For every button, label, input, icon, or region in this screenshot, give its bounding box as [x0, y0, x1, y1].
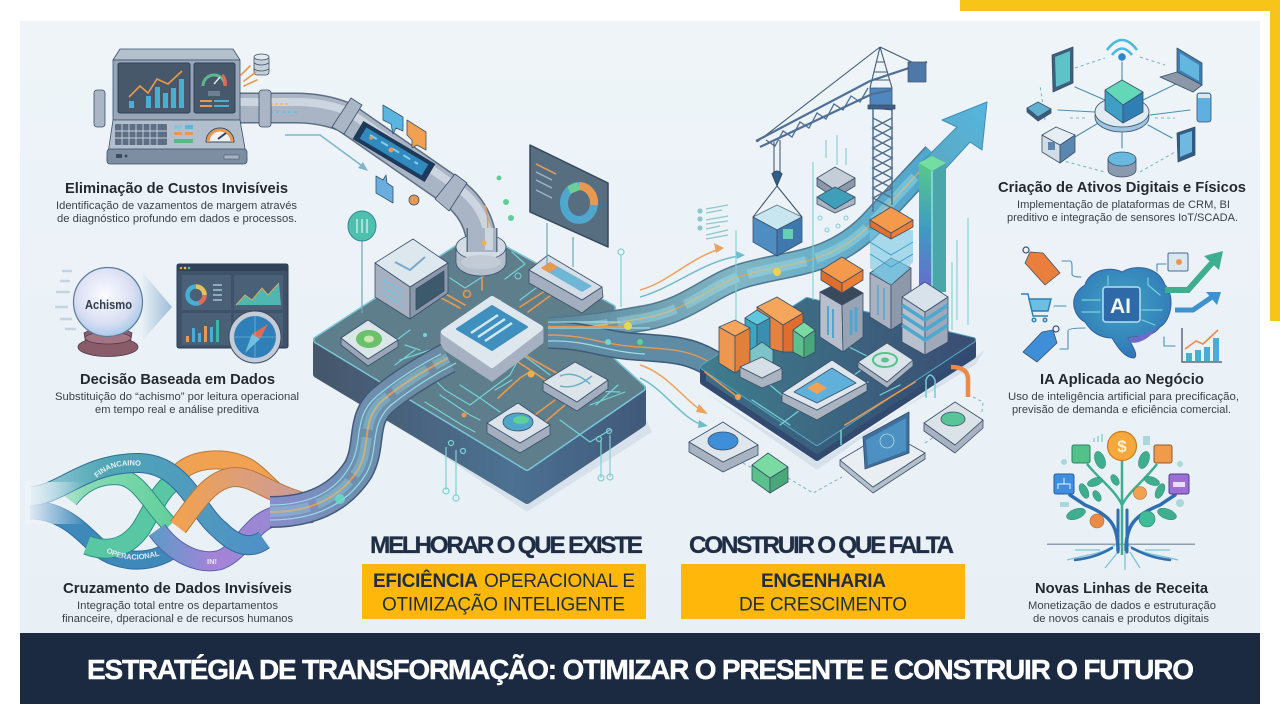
callout: eficiência operacional: OPERACIONAL E: [484, 571, 635, 592]
text: decisão baseada em dados: em tempo real e análise preditiva: [95, 404, 260, 416]
callout: eficiência operacional: [362, 564, 646, 619]
icon box: cart orange: [1154, 445, 1172, 463]
illustration: AI brain: [1021, 247, 1223, 362]
server stack: [902, 282, 948, 355]
growth arrow head: [922, 102, 987, 178]
blue device: [689, 422, 758, 472]
green block: [793, 322, 815, 358]
text: eliminação de custos: Eliminação de Custos Invisíveis: [65, 180, 288, 197]
platform shadow: [705, 350, 985, 470]
brain lobe and circuits: [1128, 327, 1157, 343]
text: eliminação de custos: [56, 180, 297, 225]
wifi icon: [1107, 40, 1137, 60]
purple ribbon: [157, 513, 312, 561]
input arrows: [1054, 261, 1085, 349]
icon box: purple panel: [1169, 474, 1189, 494]
leaves: [1065, 450, 1178, 522]
green ribbon cross: [87, 483, 172, 549]
text: IA aplicada: previsão de demanda e eficiência comercial.: [1012, 404, 1231, 416]
crane apex and cables: [757, 47, 918, 142]
mid building: [820, 281, 863, 352]
crystal ball: [74, 268, 142, 336]
laptop device: [1160, 48, 1202, 92]
platform disc: [1095, 97, 1149, 132]
main dollar coin: [1108, 432, 1136, 460]
text: eliminação de custos: de diagnóstico profundo em dados e processos.: [57, 213, 297, 225]
platform traces: [705, 345, 915, 425]
laptop: [840, 412, 925, 493]
illustration: revenue tree: [1047, 432, 1195, 570]
network lines: [1058, 62, 1190, 148]
front tablet module: [782, 360, 867, 420]
text: criação de ativos: [998, 179, 1246, 224]
crane jib: [756, 62, 927, 147]
text: criação de ativos: Implementação de plataformas de CRM, BI: [1017, 199, 1230, 211]
text: eliminação de custos: Identificação de vazamentos de margem através: [56, 200, 297, 212]
shopping cart: [1021, 294, 1051, 322]
illustration: braided data ribbons: IN!: [207, 557, 217, 566]
callout: engenharia de crescimento: DE CRESCIMENTO: [739, 594, 907, 616]
data streams: board to growth: [548, 102, 987, 428]
analytics dashboard: [177, 264, 288, 348]
crystal ball stand: [78, 326, 138, 356]
small floating marks: [1060, 434, 1184, 507]
blue lower ribbon: [30, 510, 178, 560]
orange price tag: [1023, 247, 1060, 285]
hanging connector pins: [443, 428, 613, 501]
hovering slabs: [817, 167, 855, 213]
flow arrows left of platform: [640, 243, 745, 428]
text: cruzamento de dados: financeire, dperacional e de recursos humanos: [62, 613, 293, 625]
crane mast: [873, 108, 892, 212]
mini bar chart: [1182, 328, 1222, 362]
board top: [317, 235, 642, 467]
icon box: cart green: [1072, 445, 1090, 463]
ground line: [1047, 544, 1195, 545]
labels on ribbons: FINANCAINO: [94, 460, 141, 478]
blue price tag: [1023, 326, 1059, 362]
glass data layers: [870, 230, 913, 285]
AI label: AI: [1110, 295, 1131, 318]
hanging cube: [753, 205, 802, 256]
teal connectors: [841, 375, 935, 445]
counterweight: [908, 62, 926, 82]
callout: engenharia de crescimento: ENGENHARIA: [761, 571, 886, 592]
icon box: org chart: [1054, 474, 1074, 494]
teal top ribbon: [30, 463, 264, 545]
tall building: [870, 258, 911, 330]
crane cab: [868, 88, 895, 110]
lower stream: [548, 322, 728, 374]
text: IA aplicada: Uso de inteligência artificial para precificação,: [1008, 391, 1239, 403]
text: cruzamento de dados: [62, 580, 293, 625]
left fade: [25, 482, 85, 524]
lower right chip: [543, 362, 608, 411]
yellow corner frame: [960, 0, 1280, 321]
tablet: [1052, 47, 1073, 92]
database icon: [254, 54, 269, 75]
dashed links: [743, 397, 983, 493]
hook and ropes: [753, 140, 802, 217]
left server cube: [375, 239, 448, 319]
achismo label: Achismo: [85, 297, 132, 312]
glass block and base: [740, 342, 782, 388]
platform side: [703, 340, 973, 458]
compass: [229, 311, 281, 363]
leak strokes: [241, 66, 257, 86]
left cluster large orange: [757, 297, 803, 352]
pipe with break entering board: [55, 92, 489, 250]
right device: [924, 402, 983, 453]
teal block: [745, 310, 770, 360]
roots: [1067, 545, 1178, 570]
monitor chart bars and line: [129, 79, 184, 108]
chat bubbles and coin near pipe: [376, 105, 426, 205]
console body: [107, 49, 247, 164]
fruit coins: [1090, 486, 1155, 528]
illustration: pipe and diagnostic console: [55, 49, 489, 250]
green growth arrow: [1165, 251, 1223, 290]
data stream: braid into board: [270, 354, 456, 520]
board side: [317, 340, 642, 500]
gauges: [203, 75, 225, 86]
central cube: [1105, 80, 1143, 123]
smart speaker: [1108, 152, 1136, 177]
orange cross ribbon: [178, 477, 312, 527]
green cube: [752, 453, 788, 493]
trunk and branches: [1070, 495, 1175, 560]
text: novas linhas: Monetização de dados e estruturação: [1028, 600, 1216, 612]
text: decisão baseada em dados: Decisão Baseada em Dados: [80, 371, 275, 388]
text: novas linhas: Novas Linhas de Receita: [1035, 580, 1209, 597]
lower middle chip: [487, 403, 550, 453]
board shadow: [312, 368, 652, 512]
blue growth arrow: [1175, 292, 1221, 310]
gear chip: [341, 320, 398, 366]
heading: construir: CONSTRUIR O QUE FALTA: [689, 532, 954, 559]
illustration: braided data ribbons: OPERACIONAL: [107, 548, 160, 560]
document list: [698, 205, 728, 239]
upper growth stream: [548, 155, 935, 330]
text: decisão baseada em dados: [55, 371, 299, 416]
callout: engenharia de crescimento: [681, 564, 965, 619]
text: criação de ativos: Criação de Ativos Digitais e Físicos: [998, 179, 1246, 196]
orange connector pipe: [951, 367, 968, 397]
left orange block: [719, 320, 750, 373]
circuit board platform: [312, 145, 652, 512]
right server module: [529, 255, 603, 313]
badge on post: [348, 211, 376, 313]
green target chip: [858, 343, 913, 388]
brain: [1074, 268, 1171, 358]
text: cruzamento de dados: Integração total entre os departamentos: [77, 600, 278, 612]
text: criação de ativos: preditivo e integração de sensores IoT/SCADA.: [1007, 212, 1238, 224]
orange upper ribbon: [180, 460, 290, 502]
transition triangle: [143, 273, 172, 340]
motion strokes: [55, 271, 76, 329]
text: IA aplicada: [1008, 371, 1239, 416]
callout: eficiência operacional: OTIMIZAÇÃO INTELIGENTE: [382, 594, 625, 616]
top orange cube: [870, 207, 913, 239]
construction crane: [736, 47, 968, 330]
phone: [1197, 93, 1211, 122]
callout: eficiência operacional: EFICIÊNCIA: [373, 570, 478, 592]
top right connector: [618, 249, 624, 307]
footer title: ESTRATÉGIA DE TRANSFORMAÇÃO: OTIMIZAR O PRESENTE E CONSTRUIR O FUTURO: [87, 654, 1194, 685]
illustration: connected digital assets: [1027, 40, 1211, 177]
arrow below pipe: [285, 135, 368, 171]
heading: melhorar: MELHORAR O QUE EXISTE: [370, 532, 643, 559]
sensor cube: [1042, 127, 1075, 163]
small data panel: [1157, 253, 1188, 271]
text: novas linhas: [1028, 580, 1216, 625]
router: [1027, 102, 1051, 121]
green ribbon crest: [70, 477, 170, 525]
keyboard: [115, 124, 167, 145]
main dollar coin: $: [1117, 437, 1127, 456]
illustration: braided data ribbons: [30, 450, 314, 572]
green tower: [919, 156, 946, 292]
platform rim: [703, 300, 973, 443]
platform top: [703, 300, 973, 443]
mid orange cube: [821, 257, 863, 293]
text: IA aplicada: IA Aplicada ao Negócio: [1040, 371, 1204, 388]
pipe flanges: [94, 90, 467, 211]
AI chip: [1103, 287, 1140, 322]
construction platform: [689, 156, 985, 493]
build guide lines: [736, 135, 968, 330]
footer banner: [20, 633, 1260, 704]
text: cruzamento de dados: Cruzamento de Dados Invisíveis: [63, 580, 292, 597]
dashboard on posts: [530, 145, 608, 267]
secure tablet: [1177, 127, 1195, 162]
central processor: [442, 299, 542, 380]
pipe collar with elbow end: [456, 228, 506, 276]
text: novas linhas: de novos canais e produtos digitais: [1033, 613, 1209, 625]
board rim: [317, 235, 642, 467]
text: decisão baseada em dados: Substituição do “achismo” por leitura operacional: [55, 391, 299, 403]
illustration: crystal ball to dashboard: [55, 264, 288, 363]
green drops: [496, 176, 514, 221]
circuit traces: [378, 252, 625, 442]
